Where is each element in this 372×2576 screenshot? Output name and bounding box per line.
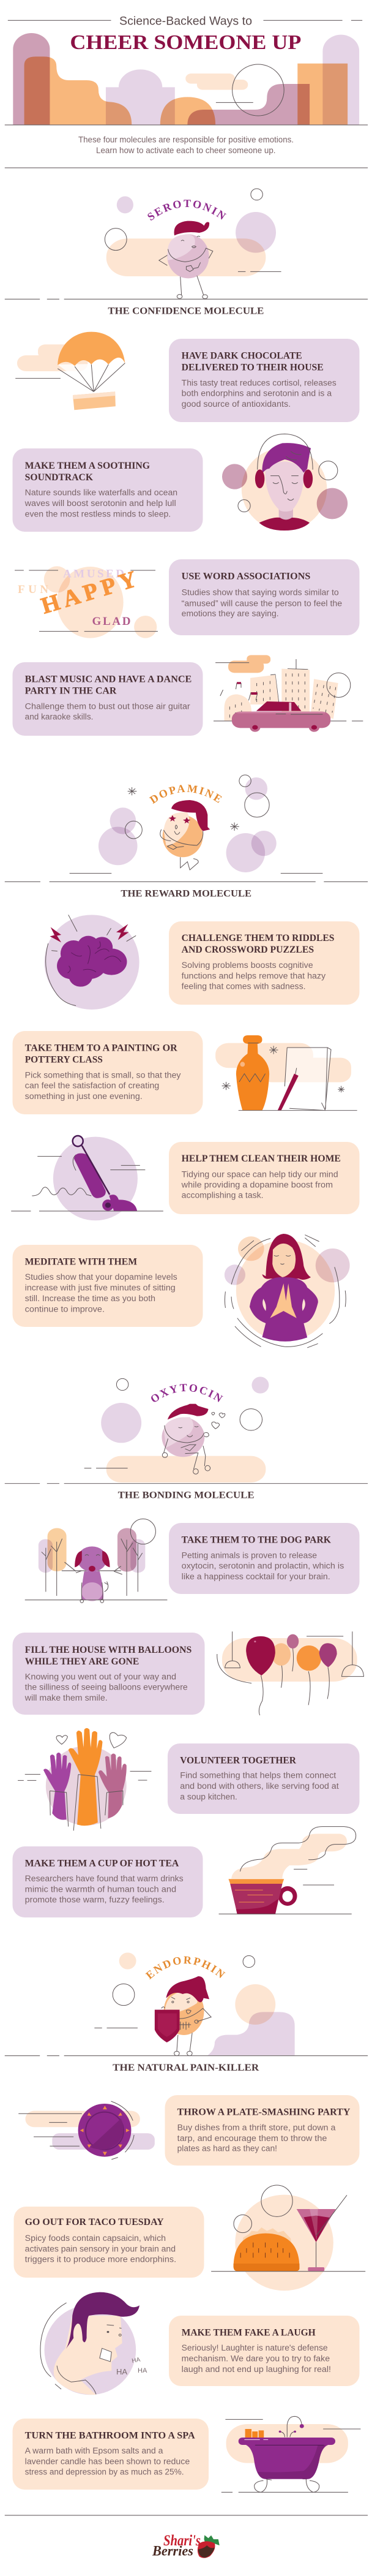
panel: riddles	[169, 921, 360, 1005]
panel: dance party: PARTY IN THE CAR	[25, 686, 117, 697]
panel: spa: TURN THE BATHROOM INTO A SPA	[25, 2431, 196, 2441]
panel: word associations: Studies show that saying words similar to	[182, 588, 339, 597]
icon: parachute	[15, 332, 125, 410]
icon: balloons	[217, 1631, 363, 1715]
panel: word associations: USE WORD ASSOCIATIONS	[182, 571, 310, 581]
panel: dance party: BLAST MUSIC AND HAVE A DANCE	[25, 674, 192, 685]
panel: pottery	[12, 1031, 203, 1114]
panel: spa: lavender candle has been shown to reduce	[25, 2457, 190, 2466]
icon: bathtub	[5, 2416, 368, 2515]
panel: taco tuesday: activates pain sensory in your brain and	[25, 2244, 176, 2253]
panel: pottery: something in just one evening.	[25, 1092, 143, 1101]
icon: dog in park	[25, 1519, 167, 1603]
icon: car and city	[214, 655, 363, 732]
panel: spa	[12, 2419, 209, 2490]
laugh text: HA	[116, 2367, 127, 2376]
panel: balloons: will make them smile.	[24, 1693, 108, 1702]
panel: taco tuesday: Spicy foods contain capsaicin, which	[25, 2234, 166, 2243]
panel: plate smashing: plates as hard as they can!	[177, 2144, 277, 2153]
panel: meditate	[12, 1245, 203, 1327]
panel: dance party	[12, 662, 203, 736]
panel: balloons: WHILE THEY ARE GONE	[25, 1656, 139, 1667]
panel: hot tea: MAKE THEM A CUP OF HOT TEA	[25, 1858, 179, 1868]
panel: plate smashing	[165, 2095, 360, 2166]
panel: clean home: while providing a dopamine boost from	[181, 1180, 333, 1189]
panel: fake a laugh	[169, 2316, 360, 2386]
panel: volunteer: Find something that helps them connect	[180, 1771, 337, 1780]
panel: dance party: Challenge them to bust out those air guitar	[25, 701, 190, 711]
panel: spa: A warm bath with Epsom salts and a	[25, 2446, 163, 2455]
serotonin subtitle: THE CONFIDENCE MOLECULE	[108, 306, 264, 316]
panel: riddles: feeling that comes with sadness.	[182, 982, 306, 991]
panel: fake a laugh: MAKE THEM FAKE A LAUGH	[182, 2327, 316, 2338]
panel: fake a laugh: Seriously! Laughter is nature's defense	[182, 2343, 328, 2352]
panel: clean home: HELP THEM CLEAN THEIR HOME	[182, 1154, 341, 1164]
icon: vase and canvas	[215, 1035, 357, 1111]
icon: laughing man: HA	[138, 2367, 147, 2374]
serotonin label: SEROTONIN	[147, 200, 226, 221]
endorphin subtitle: THE NATURAL PAIN-KILLER	[113, 2063, 259, 2073]
logo: Shari's Berries: Berries	[152, 2544, 193, 2559]
panel: soundtrack: Nature sounds like waterfalls and ocean	[25, 488, 177, 497]
panel: word associations: “amused” will cause the person to feel the	[182, 599, 342, 608]
panel: meditate: still. Increase the time as you both	[25, 1294, 155, 1303]
icon: happy words	[15, 566, 158, 638]
panel: soundtrack: SOUNDTRACK	[25, 472, 93, 483]
panel: spa: stress and depression by as much as 25%.	[25, 2468, 184, 2477]
panel: taco tuesday: triggers it to produce more endorphins.	[25, 2254, 176, 2264]
icon: raised hands	[18, 1728, 151, 1830]
panel: taco tuesday	[13, 2207, 204, 2278]
icon: laughing man	[40, 2292, 147, 2395]
oxytocin character	[5, 1377, 368, 1484]
panel: pottery: Pick something that is small, so that they	[25, 1070, 181, 1079]
icon: vacuum	[11, 1136, 163, 1220]
icon: person with headphones	[222, 434, 348, 531]
panel: balloons	[12, 1633, 204, 1715]
panel: fake a laugh: mechanism. We dare you to try to fake	[182, 2354, 330, 2363]
panel: soundtrack	[12, 448, 203, 532]
panel: clean home: Tidying our space can help tidy our mind	[182, 1169, 338, 1179]
icon: taco and cocktail	[211, 2185, 365, 2291]
panel: soundtrack: waves will boost serotonin and help lull	[24, 499, 176, 508]
icon: meditating woman	[225, 1234, 350, 1348]
intro text: These four molecules are responsible for positive emotions.	[78, 135, 294, 145]
panel: hot tea	[12, 1846, 203, 1917]
endorphin label: ENDORPHIN	[145, 1956, 225, 1980]
panel: hot tea: promote those warm, fuzzy feelings.	[25, 1895, 165, 1905]
icon: happy words: GLAD	[92, 615, 131, 628]
panel: volunteer: a soup kitchen.	[180, 1792, 237, 1801]
endorphin character	[5, 1952, 368, 2056]
title line 2: CHEER SOMEONE UP	[70, 31, 301, 54]
panel: taco tuesday: GO OUT FOR TACO TUESDAY	[25, 2217, 164, 2227]
panel: balloons: FILL THE HOUSE WITH BALLOONS	[25, 1645, 192, 1655]
panel: dance party: and karaoke skills.	[25, 712, 93, 721]
logo: Shari's Berries	[152, 2533, 220, 2559]
panel: dog park	[169, 1523, 360, 1594]
panel: balloons: the silliness of seeing balloons everywhere	[25, 1683, 188, 1692]
panel: dark chocolate: both endorphins and serotonin and is a	[182, 389, 332, 398]
panel: clean home: accomplishing a task.	[182, 1191, 263, 1200]
oxytocin subtitle: THE BONDING MOLECULE	[118, 1490, 255, 1501]
panel: plate smashing: Buy dishes from a thrift store, put down a	[177, 2123, 336, 2132]
icon: happy words: HAPPY	[39, 566, 140, 619]
icon: laughing man: HA	[132, 2357, 141, 2365]
panel: dark chocolate: DELIVERED TO THEIR HOUSE	[182, 363, 324, 373]
panel: volunteer: VOLUNTEER TOGETHER	[180, 1755, 297, 1766]
panel: hot tea: Researchers have found that warm drinks	[25, 1874, 184, 1883]
panel: dark chocolate: good source of antioxidants.	[182, 399, 291, 409]
panel: pottery: TAKE THEM TO A PAINTING OR	[25, 1043, 178, 1054]
panel: pottery: can feel the satisfaction of creating	[25, 1081, 159, 1090]
panel: meditate: continue to improve.	[25, 1304, 105, 1313]
logo: Shari's Berries: Shari's	[163, 2533, 201, 2549]
panel: clean home	[169, 1142, 360, 1214]
panel: soundtrack: MAKE THEM A SOOTHING	[25, 461, 150, 471]
serotonin character	[5, 189, 368, 300]
panel: riddles: AND CROSSWORD PUZZLES	[182, 945, 314, 955]
panel: word associations: emotions they are saying.	[182, 609, 279, 618]
panel: dark chocolate: This tasty treat reduces cortisol, releases	[182, 378, 337, 387]
panel: riddles: functions and helps remove that hazy	[182, 971, 326, 980]
icon: brain	[45, 915, 140, 1010]
panel: dark chocolate	[169, 339, 360, 422]
dopamine character	[5, 774, 368, 882]
panel: riddles: CHALLENGE THEM TO RIDDLES	[182, 933, 334, 943]
panel: riddles: Solving problems boosts cognitive	[182, 961, 313, 970]
panel: meditate: MEDITATE WITH THEM	[25, 1256, 137, 1267]
panel: balloons: Knowing you went out of your way and	[25, 1672, 176, 1681]
panel: dog park: Petting animals is proven to release	[182, 1551, 317, 1560]
panel: dog park: like a happiness cocktail for your brain.	[182, 1572, 330, 1581]
panel: meditate: Studies show that your dopamine levels	[25, 1272, 177, 1282]
icon: happy words: FUN	[18, 583, 48, 596]
panel: dark chocolate: HAVE DARK CHOCOLATE	[182, 351, 302, 361]
dopamine subtitle: THE REWARD MOLECULE	[121, 888, 251, 899]
icon: tea cup	[219, 1827, 356, 1914]
panel: dog park: TAKE THEM TO THE DOG PARK	[182, 1535, 331, 1545]
panel: pottery: POTTERY CLASS	[25, 1055, 103, 1065]
oxytocin label: OXYTOCIN	[151, 1384, 223, 1402]
panel: fake a laugh: laugh and not end up laughing for real!	[182, 2365, 331, 2374]
panel: volunteer	[168, 1743, 360, 1814]
panel: word associations	[169, 559, 360, 635]
header: Learn how to activate each to cheer someone up.	[96, 145, 275, 155]
skyline illustration	[5, 20, 368, 168]
icon: plate	[18, 2101, 155, 2159]
icon: happy words: AMUSED	[63, 568, 124, 581]
panel: plate smashing: tarp, and encourage them to throw the	[177, 2134, 327, 2143]
panel: volunteer: and bond with others, like serving food at	[180, 1781, 339, 1791]
header	[5, 15, 368, 168]
title line 1: Science-Backed Ways to	[119, 15, 252, 28]
panel: soundtrack: even the most restless minds to sleep.	[25, 509, 171, 518]
panel: hot tea: mimic the warmth of human touch and	[25, 1884, 176, 1894]
panel: plate smashing: THROW A PLATE-SMASHING PARTY	[177, 2107, 350, 2117]
dopamine label: DOPAMINE	[149, 784, 222, 804]
panel: meditate: increase with just five minutes of sitting	[25, 1283, 176, 1293]
panel: dog park: oxytocin, serotonin and prolactin, which is	[182, 1562, 344, 1571]
